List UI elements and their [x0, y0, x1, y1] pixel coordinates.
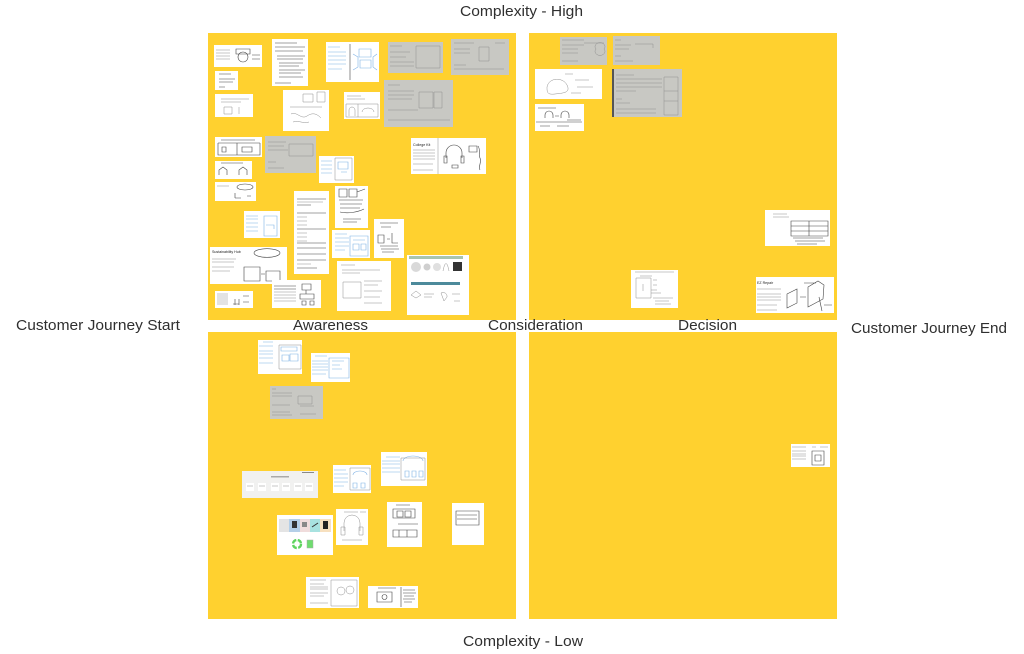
note: single-use sketch	[368, 586, 418, 608]
note: handwritten list	[272, 39, 308, 86]
note: text and sketch	[215, 291, 253, 308]
note: headphone outline with text	[306, 577, 359, 608]
note: table sketch	[765, 210, 830, 246]
note: simple sketch with bubble	[215, 182, 256, 201]
note: handwritten panel	[335, 186, 368, 228]
photo: paper sketch	[560, 37, 607, 65]
panel: low complexity, early journey	[208, 332, 516, 619]
note: college kit headphones	[411, 138, 486, 174]
note: pencil sketch with form	[631, 270, 678, 308]
photo: paper sketch	[451, 39, 509, 75]
stage label: consideration: Consideration	[488, 317, 583, 334]
note: service options screen	[242, 471, 318, 498]
note: small sketch	[215, 71, 238, 90]
note: blue wireframe	[332, 230, 370, 258]
note: teal and green product sheet	[407, 255, 469, 315]
note: college kit headphones: College Kit	[413, 143, 430, 147]
heading: complexity high: Complexity - High	[460, 3, 583, 20]
note: headphones modular sketch	[535, 104, 584, 131]
note: flow diagram	[272, 280, 321, 308]
note: blue wireframe	[326, 42, 379, 82]
photo: paper sketch	[265, 136, 316, 173]
note: EZ repair exploded sketch	[756, 277, 834, 313]
note: light pencil sketch	[215, 94, 253, 117]
note: blue wireframe	[311, 353, 350, 382]
note: headphone sketch	[336, 509, 368, 545]
note: EZ repair exploded sketch: EZ Repair	[757, 281, 774, 285]
photo: paper sketch large	[384, 80, 453, 127]
note: device parts sketch	[387, 502, 422, 547]
stage label: decision: Decision	[678, 317, 737, 334]
panel: high complexity, early journey	[208, 33, 516, 320]
note: pencil sketch map	[283, 90, 329, 131]
note: blue wireframe	[258, 340, 302, 374]
note: two panel sketch	[344, 92, 380, 119]
note: mouse pencil sketch	[535, 69, 602, 99]
heading: complexity low: Complexity - Low	[463, 633, 583, 650]
note: sketch of two devices	[215, 161, 252, 179]
note: sustainability hub: Sustainability Hub	[212, 250, 241, 254]
note: text and device sketch	[791, 444, 830, 467]
note: blue wireframe with icons	[333, 465, 371, 493]
note: pencil sketch	[337, 261, 391, 311]
photo: large paper sketch	[612, 69, 682, 117]
note: blue wireframe with icons	[381, 452, 427, 486]
photo: paper sketch	[388, 42, 443, 73]
note: sketch with text and blobs	[214, 45, 262, 67]
note: marker sketch boxes	[215, 137, 262, 157]
note: coloured product tiles with recycling icon	[277, 515, 333, 555]
stage label: awareness: Awareness	[293, 317, 368, 334]
photo: paper sketch	[270, 386, 323, 419]
axis label: customer journey end: Customer Journey End	[851, 320, 1007, 337]
note: blue wireframe	[244, 211, 280, 238]
panel: low complexity, late journey	[529, 332, 837, 619]
note: filter list	[294, 191, 329, 274]
note: blue monitor wireframe	[319, 156, 354, 183]
panel: high complexity, late journey	[529, 33, 837, 320]
note: sustainability hub	[210, 247, 287, 284]
note: handwritten sketch	[374, 219, 404, 258]
note: tall note with form sketch	[452, 503, 484, 545]
axis label: customer journey start: Customer Journey Start	[16, 317, 181, 334]
photo: paper sketch	[613, 36, 660, 65]
